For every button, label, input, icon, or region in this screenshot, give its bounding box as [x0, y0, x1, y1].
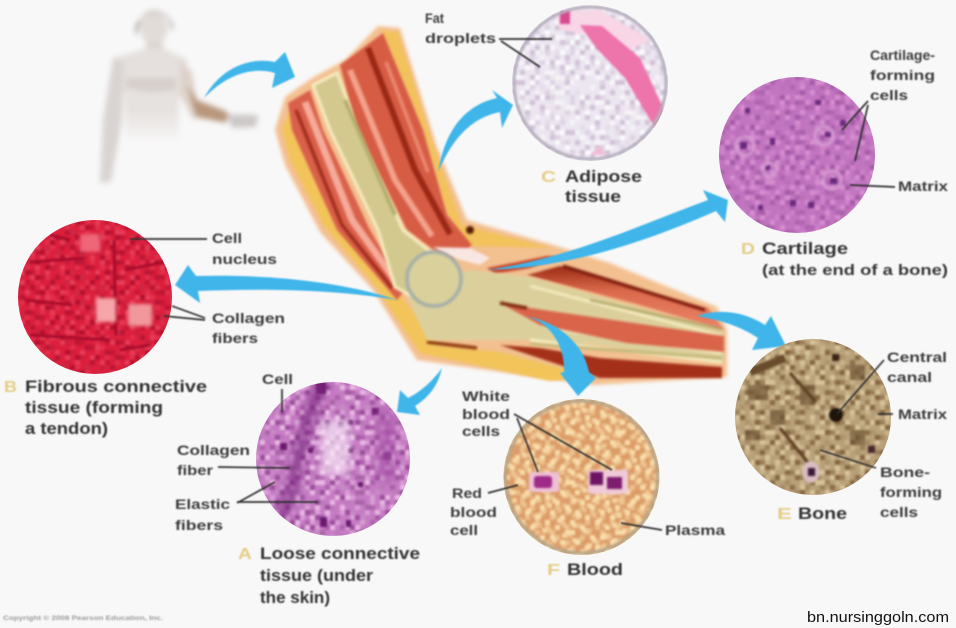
heading: D cartilage: D [741, 241, 755, 258]
heading: A loose connective tissue [238, 545, 420, 607]
website credit: bn.nursinggoln.com [807, 609, 949, 626]
arrow: elbow to bone [697, 312, 786, 350]
skin layer [275, 26, 727, 385]
label: cartilage callouts: forming [870, 68, 935, 83]
heading: F blood [547, 561, 623, 579]
heading: A loose connective tissue: tissue (under [260, 567, 374, 585]
label: loose tissue callouts: Collagen [177, 443, 250, 458]
label: loose tissue callouts: Cell [262, 372, 293, 387]
heading: B fibrous connective tissue: Fibrous connective [25, 378, 207, 396]
heading: C adipose tissue [541, 168, 642, 206]
heading: E bone [777, 505, 847, 523]
label: blood callouts: blood [462, 407, 510, 422]
leader lines [130, 39, 895, 530]
heading: B fibrous connective tissue: B [4, 379, 17, 396]
arrow: elbow to cartilage [487, 190, 728, 270]
label: blood callouts: cells [462, 424, 500, 439]
muscles [288, 33, 724, 378]
panel: fibrous connective tissue micrograph [15, 215, 175, 377]
elbow joint [407, 252, 461, 306]
label: bone callouts [880, 350, 948, 520]
label: blood callouts: White [462, 389, 511, 404]
label: adipose callouts: Fat [425, 11, 444, 26]
label: bone callouts: Bone- [880, 465, 930, 480]
heading: B fibrous connective tissue: tissue (forming [25, 399, 163, 417]
label: cartilage callouts: Cartilage- [870, 48, 935, 63]
label: loose tissue callouts: Elastic [175, 497, 231, 512]
heading: C adipose tissue: C [541, 169, 557, 186]
elbow cross-section [275, 26, 727, 385]
label: bone callouts: canal [887, 370, 932, 385]
heading: B fibrous connective tissue: a tendon) [25, 420, 108, 438]
label: fibrous callouts: Collagen [212, 311, 285, 326]
label: fibrous callouts: nucleus [212, 252, 277, 267]
heading: F blood: Blood [567, 561, 623, 579]
arrow: elbow to fibrous tissue [175, 265, 397, 303]
panel: bone micrograph [735, 339, 891, 495]
label: adipose callouts: droplets [425, 31, 496, 46]
label: fibrous callouts [212, 231, 285, 346]
arrow: elbow to adipose [438, 90, 513, 172]
label: cartilage callouts [870, 48, 949, 194]
heading: A loose connective tissue: A [238, 546, 253, 563]
heading: D cartilage [741, 240, 948, 279]
human figure with highlighted arm [100, 9, 258, 183]
heading: D cartilage: Cartilage [762, 240, 848, 258]
label: blood callouts: blood [450, 505, 497, 520]
label: bone callouts: Central [887, 350, 947, 365]
panel: blood smear micrograph [504, 399, 660, 555]
panel: cartilage micrograph [715, 75, 880, 235]
label: loose tissue callouts: fibers [175, 518, 223, 533]
heading: E bone: E [777, 506, 792, 523]
label: cartilage callouts: Matrix [898, 179, 949, 194]
arrow: body to elbow [204, 52, 295, 98]
heading: D cartilage: (at the end of a bone) [762, 263, 948, 279]
arrow: elbow to blood [525, 316, 596, 396]
heading: A loose connective tissue: the skin) [260, 589, 330, 607]
panel: adipose tissue micrograph [510, 3, 670, 163]
bone [313, 73, 724, 362]
heading: F blood: F [547, 562, 560, 579]
heading: A loose connective tissue: Loose connective [260, 545, 420, 563]
label: cartilage callouts: cells [870, 88, 908, 103]
label: loose tissue callouts [175, 372, 293, 533]
heading: C adipose tissue: tissue [565, 188, 621, 206]
panel: loose connective tissue micrograph [253, 378, 413, 540]
heading: E bone: Bone [798, 505, 847, 523]
label: blood callouts [450, 389, 726, 538]
label: bone callouts: Matrix [898, 407, 948, 422]
label: bone callouts: forming [880, 485, 942, 500]
arrow: elbow to loose tissue [397, 368, 442, 415]
heading: B fibrous connective tissue [4, 378, 207, 438]
label: fibrous callouts: fibers [212, 331, 258, 346]
label: blood callouts: Plasma [665, 523, 726, 538]
label: adipose callouts [425, 11, 496, 46]
label: loose tissue callouts: fiber [177, 463, 214, 478]
heading: C adipose tissue: Adipose [565, 168, 642, 186]
label: blood callouts: Red [452, 486, 482, 501]
label: bone callouts: cells [880, 505, 918, 520]
fat layer [282, 30, 595, 381]
label: fibrous callouts: Cell [212, 231, 242, 246]
label: blood callouts: cell [450, 523, 478, 538]
white blood cells [529, 472, 559, 492]
copyright line: Copyright © 2008 Pearson Education, Inc. [3, 614, 163, 622]
